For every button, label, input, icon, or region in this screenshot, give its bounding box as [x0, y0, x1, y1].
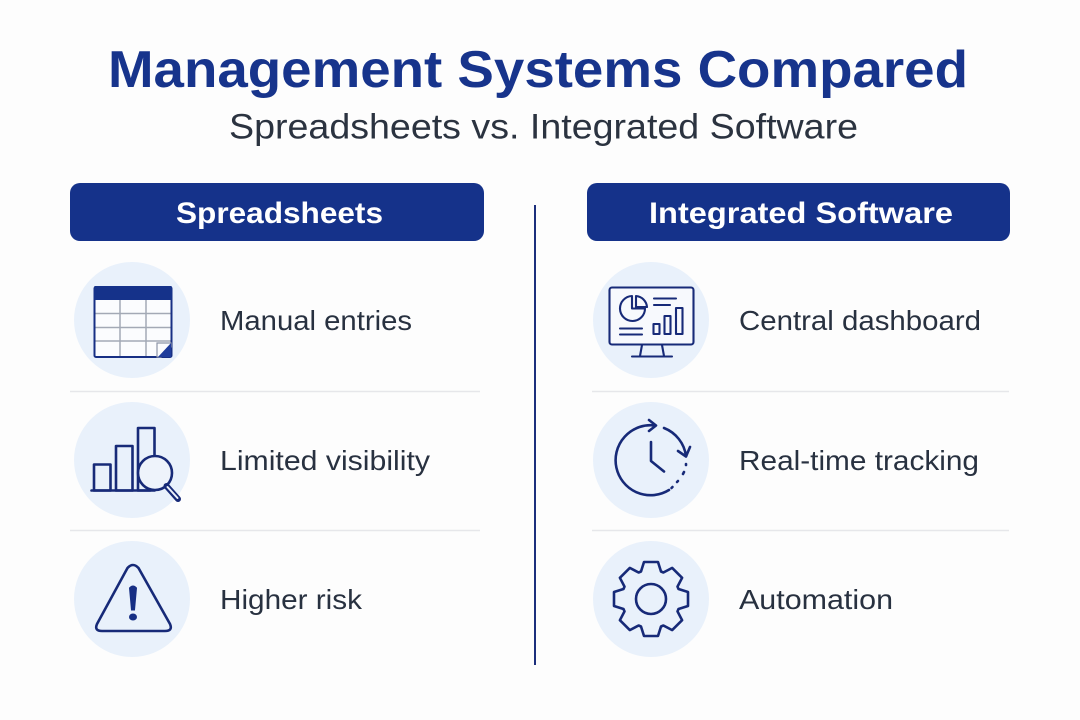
heading: spreadsheets: Spreadsheets [176, 197, 383, 230]
icon: bar chart with magnifier [74, 402, 190, 518]
label: limited visibility: Limited visibility [220, 445, 430, 476]
icon: spreadsheet table [74, 262, 190, 378]
panel: integrated software [587, 183, 1010, 657]
heading: integrated software: Integrated Software [649, 197, 953, 230]
icon: automation gear [593, 541, 709, 657]
label: manual entries: Manual entries [220, 305, 412, 336]
icon: dashboard monitor [593, 262, 709, 378]
icon: warning triangle [74, 541, 190, 657]
heading: spreadsheets [70, 183, 484, 241]
label: automation: Automation [739, 584, 893, 615]
icon: real-time clock [593, 402, 709, 518]
central divider [534, 205, 536, 665]
heading: integrated software [587, 183, 1010, 241]
title: Management Systems Compared [108, 41, 968, 99]
subtitle: Spreadsheets vs. Integrated Software [229, 108, 858, 146]
panel: spreadsheets [70, 183, 484, 657]
label: higher risk: Higher risk [220, 584, 363, 615]
label: real-time tracking: Real-time tracking [739, 445, 979, 476]
label: central dashboard: Central dashboard [739, 305, 981, 336]
